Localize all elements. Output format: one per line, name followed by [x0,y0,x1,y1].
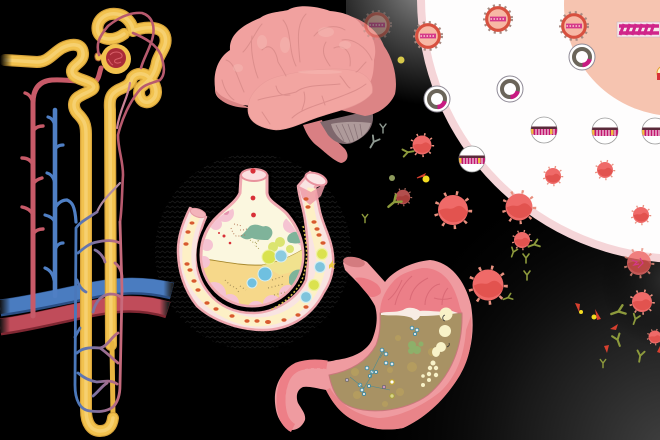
cerebellum [320,110,373,144]
pale bubbles [421,308,452,387]
yellow ring microbes [390,380,394,384]
ring discs [424,44,595,112]
yellow particles and red wedges [389,56,660,353]
blue vein tree [45,110,76,296]
crypt flask body [201,168,303,306]
brain highlights [233,27,351,74]
esophagus [342,255,381,297]
red blood cells in wall [183,197,326,324]
stomach upper mucosa [380,268,462,313]
intestinal crypt illustration [178,168,336,330]
crypt lumen contents [202,208,302,305]
proximal and distal tubules [5,14,166,431]
brainstem [303,120,348,163]
bacteria clusters [358,326,419,396]
cerebrum back shadow [300,14,396,116]
patterned DNA strip [617,22,660,37]
stomach contents [329,308,462,411]
cerebrum [215,6,375,108]
corona-like virions [364,6,587,49]
cell membrane and interior [417,0,660,263]
partial nucleus capsule [657,66,660,80]
foam layer [381,308,458,320]
outer U-shaped gut wall [178,172,333,330]
stomach outer wall [275,258,473,430]
cell nucleus [564,0,660,116]
brain [215,6,396,163]
crypt boundary dashed band [270,226,307,310]
capillary network [97,13,164,222]
stomach [275,255,473,430]
green microbe clump [408,341,424,354]
red artery tree [22,68,101,316]
epithelial pink cells [202,208,301,305]
spiky virus particles [395,134,660,344]
brain sulci folds [222,14,372,124]
horizontal blood vessels [0,285,172,327]
nephron kidney illustration [0,13,172,431]
glomerulus [95,44,131,74]
antibodies [362,124,645,368]
duodenum fold [281,364,327,428]
immune cells in wall [300,248,336,302]
receptor discs [458,117,660,172]
gut tube openings [189,170,328,219]
temporal lobe [248,69,372,130]
